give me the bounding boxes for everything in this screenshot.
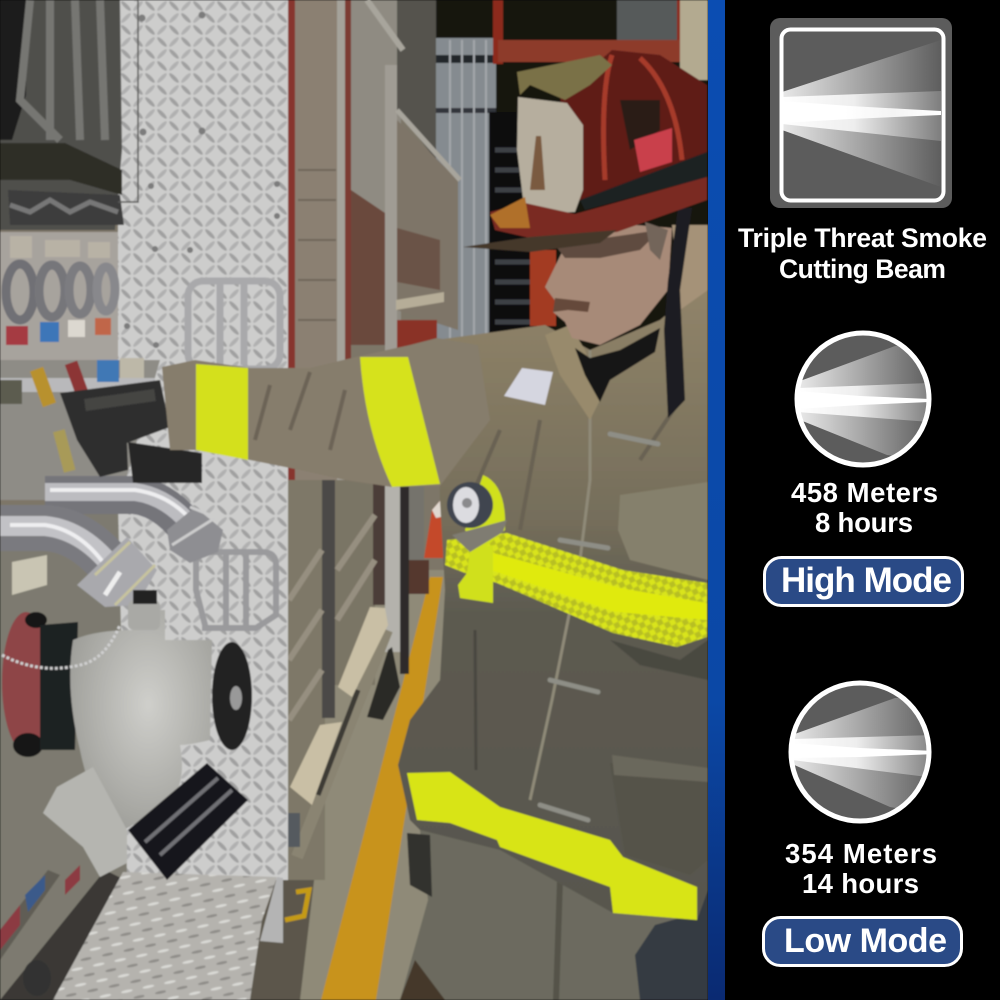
floor and yellow stripe — [250, 570, 446, 1000]
dark undershirt — [575, 328, 660, 402]
glove — [60, 380, 202, 483]
diamond step — [53, 872, 283, 1000]
truck side trim and running board — [285, 515, 388, 920]
coat hem reflective band — [407, 772, 697, 920]
fire hose bag — [0, 0, 138, 230]
coat chest reflective band — [445, 533, 707, 647]
badge: Low Mode: Low Mode — [784, 922, 947, 960]
coat collar — [545, 325, 600, 420]
firefighter face — [545, 222, 708, 345]
coat pocket and seams — [474, 350, 708, 801]
upper arm reflective band — [360, 357, 440, 487]
truck compartment doors — [288, 0, 460, 880]
warehouse background — [435, 0, 708, 350]
black feature panel — [725, 0, 1000, 1000]
badge on coat — [504, 368, 553, 405]
sleeve — [162, 338, 490, 487]
heading: Triple Threat Smoke Cutting Beam: Triple Threat Smoke — [738, 223, 987, 253]
chin strap — [664, 208, 692, 418]
badge: High Mode: High Mode — [781, 561, 952, 600]
flashlight — [447, 475, 507, 603]
icon: high mode beam circle — [797, 333, 930, 465]
helmet black band — [580, 152, 707, 210]
heading: Triple Threat Smoke Cutting Beam: Cutting Beam — [779, 254, 946, 284]
diamond plate panel — [118, 0, 288, 880]
helmet visor — [463, 230, 617, 252]
coat body — [398, 280, 708, 920]
text: low mode range and runtime: 14 hours — [802, 868, 919, 899]
firefighter trousers — [400, 830, 708, 1000]
coat clasps — [540, 434, 658, 820]
pump panel with gauges — [0, 232, 160, 500]
hydrant gate valve — [2, 590, 252, 880]
icon: smoke cutting beam square — [770, 18, 952, 208]
photo: firefighter at pump panel — [0, 0, 708, 1000]
helmet brim — [490, 177, 707, 238]
helmet gold crest — [517, 55, 612, 100]
text: low mode range and runtime: 354 Meters — [785, 838, 937, 869]
helmet ribs and tag — [604, 55, 682, 180]
lower pump panel — [0, 505, 130, 1000]
heading: Triple Threat Smoke Cutting Beam — [738, 223, 987, 284]
helmet leather shield — [517, 97, 583, 215]
chrome pipes — [0, 490, 198, 575]
text: low mode range and runtime — [785, 838, 937, 899]
blue divider strip — [708, 0, 725, 1000]
grab handle upper — [188, 281, 280, 369]
cuff reflective band — [196, 364, 248, 460]
text: high mode range and runtime: 8 hours — [815, 507, 913, 538]
icon: low mode beam circle — [791, 683, 935, 821]
helmet brim gold — [490, 197, 530, 228]
badge: Low Mode — [764, 918, 962, 966]
rivets — [124, 12, 280, 348]
pipe clamps and warning label — [12, 507, 223, 607]
text: high mode range and runtime: 458 Meters — [791, 477, 938, 508]
grab handle lower — [196, 552, 276, 628]
sleeve folds — [255, 372, 345, 450]
text: high mode range and runtime — [791, 477, 938, 538]
helmet dome — [560, 50, 707, 200]
